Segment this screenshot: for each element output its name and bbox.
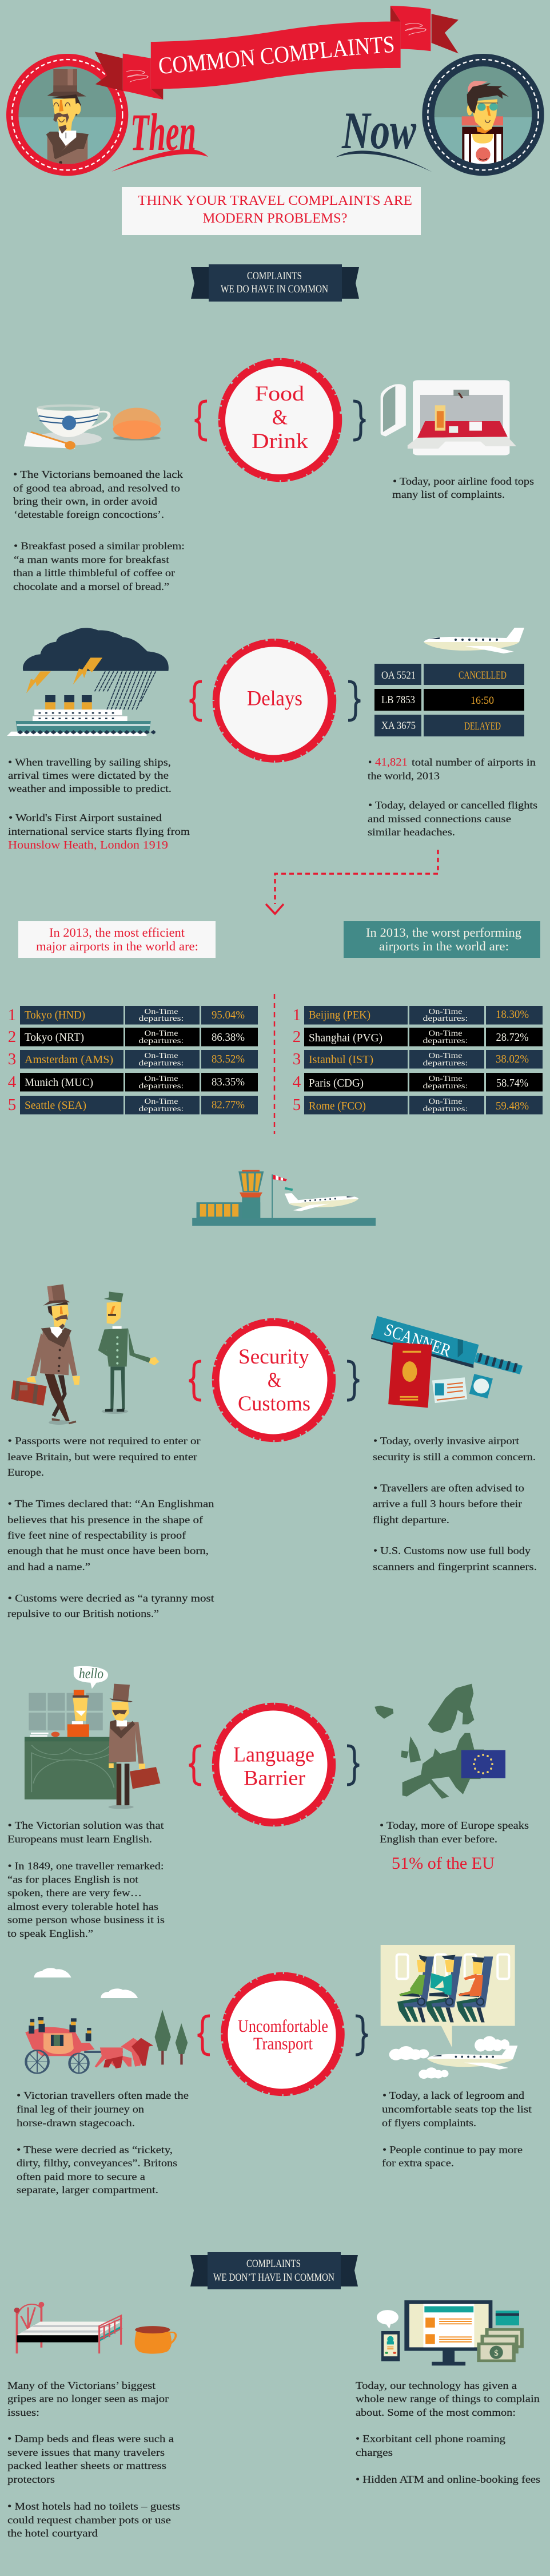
text: victorian security: five feet nine of respectability is proof xyxy=(7,1529,186,1541)
text: victorian language: • The Victorian solution was that xyxy=(8,1820,164,1831)
section banner: complaints we do have in common: COMPLAINTS xyxy=(247,270,302,282)
row: Beijing: departures: xyxy=(423,1014,468,1023)
illustration: europe map with eu flag xyxy=(374,1684,505,1799)
text: victorian language: spoken, there are very few… xyxy=(7,1887,142,1899)
text: modern security: scanners and fingerprint scanners. xyxy=(373,1561,537,1572)
text: victorian security: repulsive to our British notions.” xyxy=(7,1608,159,1619)
text: victorian delays: arrival times were dictated by the xyxy=(8,770,169,781)
illustration: airline meal oven xyxy=(381,380,516,455)
row: Munich: 83.35% xyxy=(212,1076,245,1088)
row: Amsterdam: 3 xyxy=(8,1050,16,1068)
food ring and label: Drink xyxy=(252,430,309,453)
departures board: XA 3675 xyxy=(381,720,416,732)
text: victorian gripes: Many of the Victorians’ biggest xyxy=(7,2380,156,2391)
text: victorian gripes: • Damp beds and fleas were such a xyxy=(7,2433,174,2444)
text: victorian transport: • Victorian travellers often made the xyxy=(17,2090,189,2101)
now lettering: Now xyxy=(341,101,416,160)
text: victorian security: • Passports were not required to enter or xyxy=(8,1435,200,1446)
uncomfortable transport ring and label: Uncomfortable xyxy=(238,2016,328,2036)
departures board: CANCELLED xyxy=(459,669,507,681)
text: modern transport: • People continue to pay more xyxy=(382,2144,523,2155)
text: victorian food: ‘detestable foreign concoctions’. xyxy=(14,509,164,520)
delays left brace xyxy=(190,681,202,720)
text: victorian transport: dirty, filthy, conveyances”. Britons xyxy=(17,2157,177,2169)
text: modern gripes: charges xyxy=(356,2447,393,2458)
ribbon folds xyxy=(151,6,401,100)
text: victorian security: leave Britain, but were required to enter xyxy=(7,1451,197,1463)
row: Amsterdam: departures: xyxy=(138,1059,184,1068)
security ring and label xyxy=(213,1319,335,1441)
then lettering xyxy=(111,103,208,172)
text: modern security xyxy=(373,1435,537,1572)
illustration: teacup and bun xyxy=(24,405,161,450)
ribbon title text: COMMON COMPLAINTS xyxy=(159,37,393,73)
text: modern food: • Today, poor airline food tops xyxy=(393,475,534,487)
row: Seattle: On-Time xyxy=(144,1097,178,1106)
row: Amsterdam: 83.52% xyxy=(212,1053,245,1065)
text: modern delays: the world, 2013 xyxy=(368,770,440,782)
passenger: orange shirt xyxy=(456,1956,493,2022)
heading: worst performing airports xyxy=(344,921,540,958)
transport left brace xyxy=(198,2016,210,2055)
text: victorian security: enough that he must once have been born, xyxy=(7,1545,209,1556)
text: victorian language: some person whose business it is xyxy=(7,1914,165,1925)
row: Tokyo HND: On-Time xyxy=(144,1008,178,1016)
ribbon left tail xyxy=(95,51,123,91)
header illustration: then portrait xyxy=(6,54,128,176)
text: modern security: flight departure. xyxy=(373,1514,449,1525)
row: Beijing xyxy=(293,1006,543,1024)
text: modern language xyxy=(380,1820,529,1873)
illustration: airline seats speech panel and plane xyxy=(381,1945,517,2079)
row: Tokyo HND: departures: xyxy=(138,1014,184,1023)
departures board: LB 7853 xyxy=(381,694,415,706)
departures board xyxy=(374,664,524,736)
uncomfortable transport ring and label: Transport xyxy=(253,2034,313,2053)
row: Tokyo HND: 1 xyxy=(8,1006,16,1024)
section banner: complaints we do have in common: WE DO HAVE IN COMMON xyxy=(221,283,328,295)
then lettering: Then xyxy=(130,103,196,161)
heading: most efficient airports: major airports in the world are: xyxy=(36,939,198,953)
delays ring and label xyxy=(214,640,335,762)
illustration: computer, phone, card and money xyxy=(377,2300,524,2365)
security ring and label: Customs xyxy=(238,1392,310,1416)
text: modern delays: and missed connections cause xyxy=(368,813,511,825)
row: Rome: 5 xyxy=(293,1096,301,1114)
row: Tokyo NRT: On-Time xyxy=(144,1029,178,1038)
row: Tokyo NRT: 86.38% xyxy=(212,1031,245,1044)
text: modern language: English than ever before. xyxy=(380,1833,497,1845)
language ring and label xyxy=(213,1704,335,1825)
text: victorian language xyxy=(7,1820,165,1939)
text: modern transport xyxy=(382,2090,532,2169)
row: Shanghai: 28.72% xyxy=(496,1031,528,1044)
ribbon right tail xyxy=(432,14,459,54)
row: Beijing: Beijing (PEK) xyxy=(309,1009,370,1021)
row: Shanghai: departures: xyxy=(423,1037,468,1045)
food right brace xyxy=(353,401,365,440)
row: Istanbul: Istanbul (IST) xyxy=(309,1053,373,1066)
text: victorian delays: • When travelling by sailing ships, xyxy=(8,756,171,768)
illustration: scanner, passport and documents: SCANNER xyxy=(382,1319,454,1361)
text: victorian gripes: • Most hotels had no toilets – guests xyxy=(7,2500,180,2512)
text: victorian security: • Customs were decried as “a tyranny most xyxy=(8,1592,214,1604)
text: modern security: • Today, overly invasive airport xyxy=(373,1435,519,1446)
ribbon flourishes xyxy=(126,23,426,82)
text: modern gripes: • Exorbitant cell phone roaming xyxy=(356,2433,505,2444)
row: Amsterdam: Amsterdam (AMS) xyxy=(25,1053,113,1066)
text: modern security: arrive a full 3 hours before their xyxy=(373,1498,522,1509)
food ring and label: Food xyxy=(255,382,305,406)
language ring and label: Barrier xyxy=(244,1767,305,1790)
row: Beijing: On-Time xyxy=(429,1008,462,1016)
heading: most efficient airports: In 2013, the most efficient xyxy=(49,925,185,940)
text: victorian gripes: severe issues that many travelers xyxy=(7,2447,165,2458)
illustration: hotel desk, bellhop and traveller xyxy=(25,1666,160,1809)
row: Munich: Munich (MUC) xyxy=(25,1076,93,1089)
illustration: victorian traveller and guard xyxy=(11,1284,159,1425)
security right brace xyxy=(347,1361,359,1400)
text: modern security: • U.S. Customs now use full body xyxy=(373,1545,531,1556)
delays right brace xyxy=(348,681,360,720)
text: victorian language: to speak English.” xyxy=(7,1928,93,1939)
text: modern gripes xyxy=(356,2380,540,2485)
text: victorian gripes: issues: xyxy=(7,2407,39,2418)
row: Amsterdam: On-Time xyxy=(144,1052,178,1060)
text: victorian food: of good tea abroad, and resolved to xyxy=(13,482,180,494)
text: victorian food: than a little thimbleful of coffee or xyxy=(13,567,175,578)
text: victorian transport: final leg of their journey on xyxy=(17,2103,144,2115)
row: Tokyo HND: 95.04% xyxy=(212,1009,245,1021)
section banner: complaints we don't have in common: COMPLAINTS xyxy=(246,2258,301,2270)
row: Tokyo NRT xyxy=(8,1028,258,1046)
row: Shanghai: On-Time xyxy=(429,1029,462,1038)
text: victorian transport: horse-drawn stagecoach. xyxy=(17,2117,135,2129)
text: victorian delays: international service starts flying from xyxy=(8,826,190,837)
heading: worst performing airports: airports in the world are: xyxy=(379,939,509,953)
row: Munich xyxy=(8,1073,258,1092)
row: Istanbul: On-Time xyxy=(429,1052,462,1060)
table: most efficient airports xyxy=(8,1006,258,1115)
text: modern security: security is still a common concern. xyxy=(373,1451,536,1463)
heading: worst performing airports: In 2013, the worst performing xyxy=(366,925,521,940)
row: Rome: On-Time xyxy=(429,1097,462,1106)
row: Beijing: 1 xyxy=(293,1006,301,1024)
header illustration: now portrait xyxy=(422,54,544,176)
row: Paris: On-Time xyxy=(429,1075,462,1083)
text: modern transport: uncomfortable seats top the list xyxy=(382,2103,532,2115)
passenger: teal shirt xyxy=(425,1955,462,2022)
text: modern food xyxy=(392,475,534,500)
section banner: complaints we don't have in common: WE DON’T HAVE IN COMMON xyxy=(213,2272,334,2284)
transport right brace xyxy=(356,2016,368,2055)
row: Tokyo NRT: 2 xyxy=(8,1028,16,1046)
heading: most efficient airports xyxy=(18,921,216,958)
intro question box: THINK YOUR TRAVEL COMPLAINTS ARE xyxy=(138,193,412,208)
delays ring and label: Delays xyxy=(247,687,302,711)
illustration: scanner, passport and documents xyxy=(371,1316,523,1408)
text: modern delays xyxy=(368,756,537,838)
text: victorian delays xyxy=(8,756,190,851)
intro question box xyxy=(122,187,421,235)
departures board: DELAYED xyxy=(464,720,501,732)
row: Paris: Paris (CDG) xyxy=(309,1077,364,1089)
section banner: complaints we don't have in common xyxy=(190,2252,358,2289)
text: modern language: 51% of the EU xyxy=(392,1854,495,1873)
text: victorian transport xyxy=(17,2090,189,2195)
row: Munich: On-Time xyxy=(144,1075,178,1083)
text: victorian language: Europeans must learn English. xyxy=(7,1833,152,1845)
text: victorian food: • Breakfast posed a similar problem: xyxy=(14,540,185,552)
row: Rome: 59.48% xyxy=(496,1100,529,1112)
ribbon right end xyxy=(390,6,431,51)
table: worst performing airports xyxy=(293,1006,543,1115)
text: victorian gripes xyxy=(7,2380,180,2539)
row: Shanghai xyxy=(293,1028,543,1046)
text: modern gripes: • Hidden ATM and online-booking fees xyxy=(356,2474,540,2485)
row: Munich: departures: xyxy=(138,1082,184,1091)
illustration: jet plane xyxy=(424,628,524,653)
text: victorian security: believes that his presence in the shape of xyxy=(7,1514,203,1525)
row: Paris: 58.74% xyxy=(496,1077,528,1089)
illustration: stagecoach, horses, trees and clouds xyxy=(25,1968,188,2073)
row: Paris xyxy=(293,1073,543,1092)
text: victorian food: “a man wants more for breakfast xyxy=(14,554,169,565)
food ring and label xyxy=(220,359,341,481)
text: modern delays: • xyxy=(368,756,372,768)
text: modern language: • Today, more of Europe speaks xyxy=(380,1820,529,1831)
text: victorian transport: • These were decried as “rickety, xyxy=(17,2144,173,2155)
row: Amsterdam xyxy=(8,1050,258,1069)
text: victorian delays: • World's First Airport sustained xyxy=(9,812,162,823)
text: modern transport: for extra space. xyxy=(382,2157,454,2169)
uncomfortable transport ring and label xyxy=(222,1973,344,2095)
text: victorian delays: Hounslow Heath, London 1919 xyxy=(8,839,168,851)
illustration: airport tower and plane xyxy=(192,1170,376,1226)
food ring and label: & xyxy=(272,406,288,429)
text: modern food: many list of complaints. xyxy=(392,489,505,500)
text: victorian transport: separate, larger compartment. xyxy=(17,2184,158,2195)
row: Seattle: 82.77% xyxy=(212,1099,245,1111)
row: Paris: 4 xyxy=(293,1073,301,1091)
passenger: green shirt xyxy=(397,1955,434,2022)
language left brace xyxy=(189,1746,201,1785)
row: Rome xyxy=(293,1096,543,1115)
row: Seattle: 5 xyxy=(8,1096,16,1114)
text: victorian transport: often paid more to secure a xyxy=(17,2171,145,2182)
row: Rome: departures: xyxy=(423,1105,468,1113)
text: victorian gripes: could request chamber pots or use xyxy=(7,2514,171,2526)
text: modern gripes: about. Some of the most common: xyxy=(356,2407,516,2418)
language right brace xyxy=(347,1746,359,1785)
text: victorian food: • The Victorians bemoaned the lack xyxy=(13,469,183,480)
text: victorian delays: weather and impossible to predict. xyxy=(8,783,172,794)
text: victorian language: almost every tolerable hotel has xyxy=(7,1901,158,1912)
row: Istanbul xyxy=(293,1050,543,1069)
text: modern delays: total number of airports in xyxy=(412,756,536,768)
text: victorian food xyxy=(13,469,185,592)
row: Rome: Rome (FCO) xyxy=(309,1100,366,1112)
row: Shanghai: 2 xyxy=(293,1028,301,1046)
text: victorian security: Europe. xyxy=(7,1467,44,1478)
row: Istanbul: 3 xyxy=(293,1050,301,1068)
row: Paris: departures: xyxy=(423,1082,468,1091)
text: victorian security: • The Times declared that: “An Englishman xyxy=(8,1498,214,1509)
row: Munich: 4 xyxy=(8,1073,17,1091)
security ring and label: & xyxy=(268,1369,281,1392)
text: modern transport: of flyers complaints. xyxy=(382,2117,476,2129)
illustration: storm cloud and steamship xyxy=(7,628,169,736)
illustration: computer, phone, card and money: $ xyxy=(494,2349,499,2358)
section banner: complaints we do have in common xyxy=(191,264,359,302)
departures board: OA 5521 xyxy=(381,669,416,681)
intro question box: MODERN PROBLEMS? xyxy=(202,211,348,226)
row: Tokyo HND: Tokyo (HND) xyxy=(25,1009,85,1021)
language ring and label: Language xyxy=(233,1743,314,1767)
row: Seattle: Seattle (SEA) xyxy=(25,1099,86,1112)
text: victorian gripes: protectors xyxy=(7,2474,55,2485)
text: victorian gripes: gripes are no longer seen as major xyxy=(7,2393,169,2404)
ribbon main band xyxy=(151,21,401,89)
text: modern delays: similar headaches. xyxy=(368,826,455,838)
text: modern gripes: whole new range of things to complain xyxy=(356,2393,540,2404)
row: Seattle xyxy=(8,1096,258,1115)
title ribbon xyxy=(95,6,459,100)
text: modern gripes: Today, our technology has given a xyxy=(356,2380,517,2391)
departures board: 16:50 xyxy=(471,695,494,707)
row: Tokyo NRT: Tokyo (NRT) xyxy=(25,1031,84,1044)
text: victorian language: • In 1849, one traveller remarked: xyxy=(8,1860,164,1872)
text: modern delays: 41,821 xyxy=(375,756,408,768)
security ring and label: Security xyxy=(238,1345,309,1369)
text: victorian food: bring their own, in order avoid xyxy=(13,496,157,507)
security left brace xyxy=(189,1361,201,1400)
food left brace xyxy=(195,401,207,440)
row: Shanghai: Shanghai (PVG) xyxy=(309,1032,382,1044)
dashed arrow to airport rankings xyxy=(266,850,438,914)
text: victorian security: and had a name.” xyxy=(7,1561,90,1572)
text: victorian security xyxy=(7,1435,214,1619)
text: victorian gripes: packed leather sheets or mattress xyxy=(7,2460,166,2471)
text: victorian language: “as for places English is not xyxy=(7,1873,138,1885)
row: Beijing: 18.30% xyxy=(496,1008,529,1021)
row: Tokyo HND xyxy=(8,1006,258,1024)
text: victorian gripes: the hotel courtyard xyxy=(7,2527,98,2539)
illustration: hotel desk, bellhop and traveller: hello xyxy=(79,1666,103,1682)
text: modern transport: • Today, a lack of legroom and xyxy=(382,2090,524,2101)
text: modern delays: • Today, delayed or cancelled flights xyxy=(368,799,537,811)
ribbon left end xyxy=(123,54,163,100)
row: Istanbul: 38.02% xyxy=(496,1053,529,1065)
text: victorian food: chocolate and a morsel of bread.” xyxy=(13,581,169,592)
text: modern security: • Travellers are often advised to xyxy=(373,1482,524,1493)
row: Tokyo NRT: departures: xyxy=(138,1037,184,1045)
row: Istanbul: departures: xyxy=(423,1059,468,1068)
row: Seattle: departures: xyxy=(138,1105,184,1113)
illustration: iron bed and chamber pot xyxy=(14,2302,176,2354)
